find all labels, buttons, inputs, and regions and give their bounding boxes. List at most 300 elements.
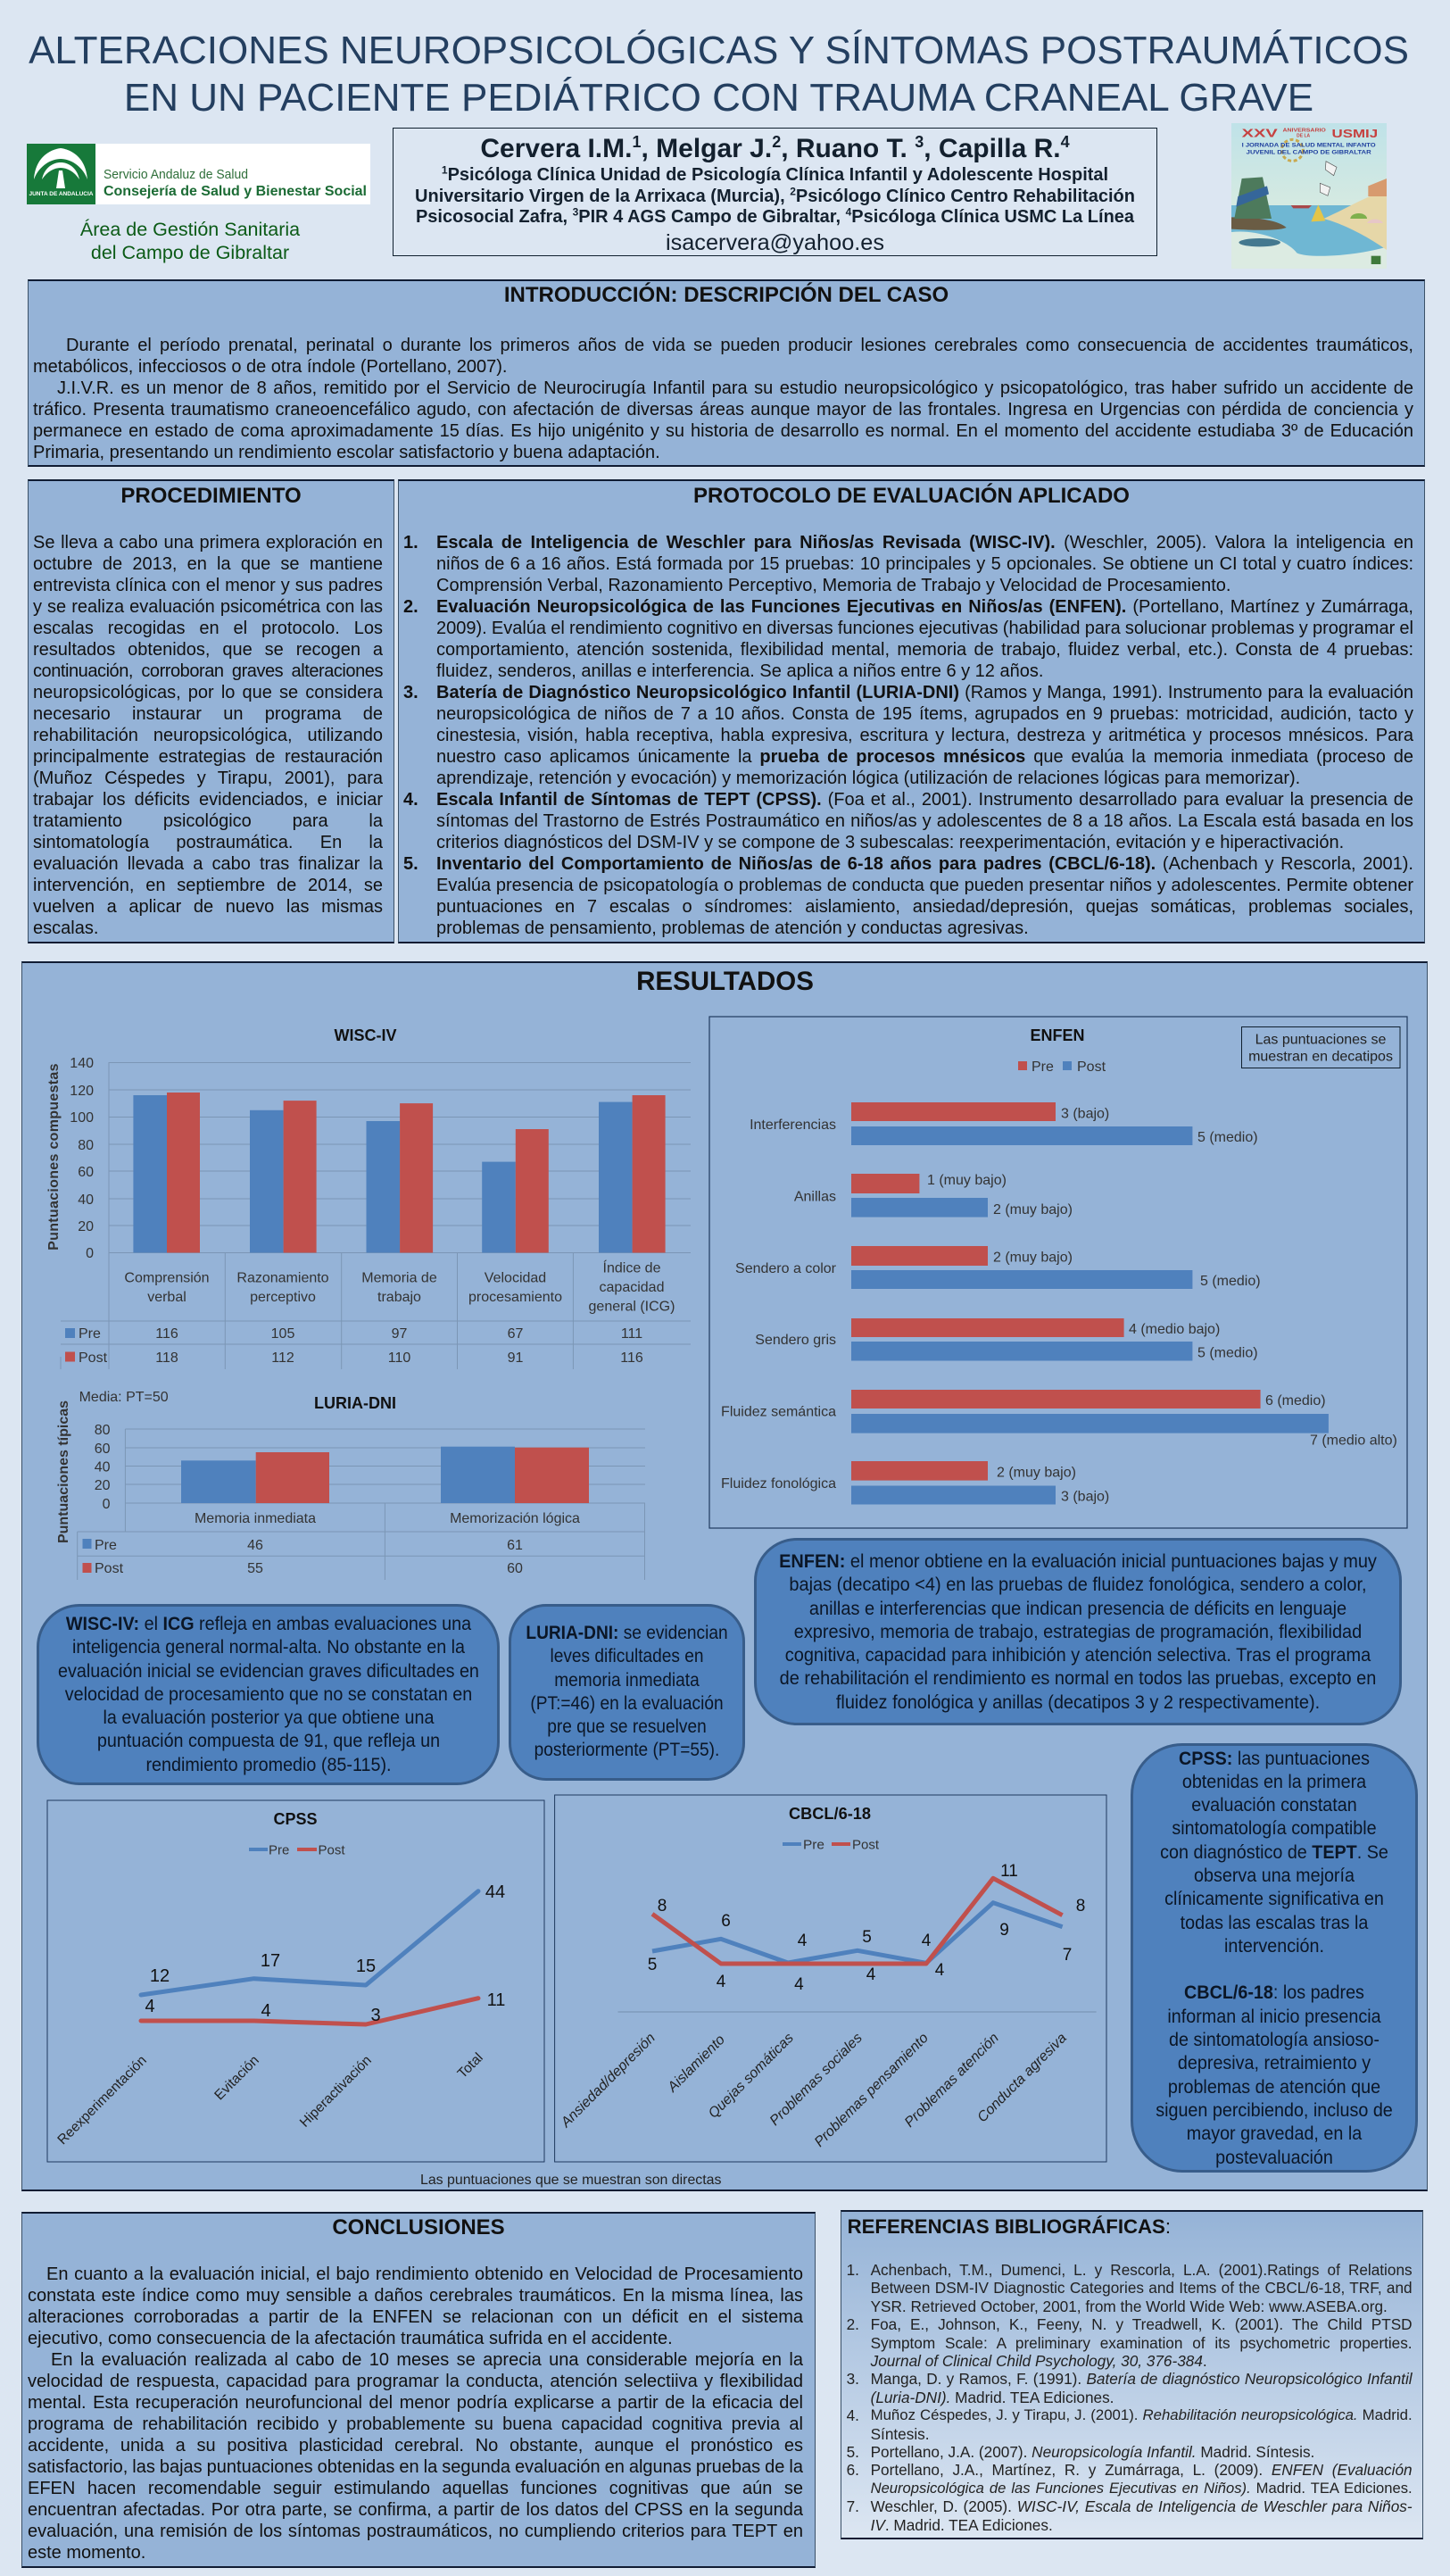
references list: Manga, D. y Ramos, F. (1991). Batería de diagnóstico Neuropsicológico Infantil (871, 2370, 1413, 2388)
callout: CPSS and CBCL: sintomatología compatible (1172, 1818, 1377, 1839)
WISC-IV data table: 118 (155, 1350, 178, 1366)
callout: CPSS and CBCL: observa una mejoría (1194, 1866, 1355, 1886)
WISC-IV category labels: Memoria de (361, 1271, 437, 1285)
CBCL data labels: 7 (1063, 1946, 1072, 1965)
CPSS x axis labels: Evitación (211, 2053, 262, 2103)
CPSS data labels: 12 (150, 1966, 170, 1986)
WISC-IV category labels: general (ICG) (589, 1300, 675, 1314)
references list: Symptom Scale: A preliminary examination of its psychometric properties. (871, 2334, 1413, 2352)
references list: Portellano, J.A. (2007). Neuropsicología Infantil. Madrid. Síntesis. (871, 2443, 1314, 2461)
CPSS title: CPSS (273, 1810, 318, 1828)
CBCL data labels: 8 (1076, 1897, 1085, 1915)
ENFEN data labels: 3 (bajo) (1061, 1489, 1109, 1505)
CBCL data labels: 6 (721, 1912, 731, 1931)
protocol list: Evaluación Neuropsicológica de las Funciones Ejecutivas en Niños/as (ENFEN). (Portellano, Martínez y Zumárraga, (436, 596, 1413, 616)
WISC-IV y axis title: Puntuaciones compuestas (46, 1063, 62, 1251)
LURIA data table: 60 (507, 1561, 523, 1576)
references list: Foa, E., Johnson, K., Feeny, N. y Treadwell, K. (2001). The Child PTSD (871, 2315, 1413, 2333)
panel: evaluation protocol: 5. (403, 853, 418, 873)
callout: CPSS and CBCL: postevaluación (1215, 2148, 1333, 2168)
protocol list: 2009). Evalúa el rendimiento cognitivo en diversas funciones ejecutivas (habilidad para solucionar problemas y programar el (436, 618, 1413, 637)
procedure text: y se realiza evaluación psicométrica con las (33, 596, 383, 616)
conference poster image (1231, 123, 1387, 269)
WISC-IV data table: 112 (271, 1350, 294, 1366)
callout: WISC-IV: puntuación compuesta de 91, que refleja un (96, 1731, 440, 1751)
procedure text: rehabilitación neuropsicológica, utilizando (33, 725, 383, 744)
introduction text: tráfico. Presenta traumatismo craneoencefálico agudo, con afectación de diversas áreas aunque mayor de las frontales. Ingresa en Urgencias con pérdida de conciencia y (33, 400, 1413, 420)
procedure text: intervención, en septiembre de 2014, se (33, 875, 383, 894)
ENFEN pre bars (851, 1102, 1261, 1481)
protocol list: Batería de Diagnóstico Neuropsicológico Infantil (LURIA-DNI) (Ramos y Manga, 1991). Instrumento para la evaluación (436, 682, 1413, 702)
WISC-IV data table: 91 (508, 1350, 523, 1366)
CBCL axis line (617, 2011, 1097, 2013)
callout: CPSS and CBCL: depresiva, retraimiento y (1178, 2053, 1371, 2073)
references list: IV. Madrid. TEA Ediciones. (871, 2516, 1053, 2534)
LURIA category labels (195, 1511, 580, 1526)
CBCL data labels: 5 (648, 1956, 657, 1974)
ENFEN category labels: Fluidez fonológica (721, 1476, 836, 1492)
procedure text: escalas recogidas en el protocolo. Los (33, 618, 383, 637)
references list: Portellano, J.A., Martínez, R. y Zumárraga, L. (2009). ENFEN (Evaluación (871, 2461, 1413, 2479)
ENFEN data labels: 5 (medio) (1197, 1130, 1258, 1145)
callout: CPSS and CBCL: clínicamente significativa en (1164, 1889, 1384, 1909)
CBCL pre line (652, 1903, 1063, 1963)
title: EN UN PACIENTE PEDIÁTRICO CON TRAUMA CRANEAL GRAVE (124, 76, 1313, 120)
WISC-IV category labels: Índice de (603, 1259, 661, 1276)
conclusions heading: CONCLUSIONES (332, 2215, 505, 2239)
CBCL x axis labels: Problemas pensamiento (812, 2031, 932, 2150)
protocol list: nuestro caso aplicamos únicamente la prueba de procesos mnésicos que evalúa la memoria inmediata (proceso de (436, 746, 1413, 766)
CBCL data labels: 5 (862, 1928, 872, 1947)
ENFEN data labels: 2 (muy bajo) (993, 1202, 1073, 1217)
callout: CPSS and CBCL: intervención. (1224, 1936, 1324, 1957)
conclusions text: evaluación, una remisión de los síntomas postraumáticos, no cumpliendo criterios para TEPT en (28, 2521, 803, 2540)
LURIA y axis labels: 40 (95, 1460, 111, 1475)
ENFEN post bars (851, 1126, 1329, 1505)
ENFEN frame (709, 1017, 1407, 1528)
protocol list: cinestesia, visión, habla receptiva, habla expresiva, escritura y lectura, destreza y aritmética y procesos mnésicos. Para (436, 725, 1413, 744)
panel: introduction (28, 279, 1425, 467)
CBCL x axis labels: Problemas sociales (767, 2031, 866, 2129)
logo: Servicio Andaluz de Salud: Servicio Andaluz de Salud (104, 168, 248, 182)
WISC-IV data table: 111 (621, 1326, 642, 1342)
callout: LURIA-DNI: posteriormente (PT=55). (534, 1740, 719, 1760)
affiliations: Psicosocial Zafra, 3PIR 4 AGS Campo de Gibraltar, 4Psicóloga Clínica USMC La Línea (416, 206, 1134, 227)
CBCL x axis labels: Quejas somáticas (706, 2031, 797, 2122)
WISC-IV data table: 110 (388, 1350, 410, 1366)
CBCL data labels: 4 (922, 1932, 932, 1950)
ENFEN title: ENFEN (1030, 1026, 1085, 1044)
logo: Servicio Andaluz de Salud (27, 144, 370, 204)
callout: WISC-IV: WISC-IV: el ICG refleja en ambas evaluaciones una (65, 1614, 471, 1634)
LURIA data table: Post (95, 1561, 124, 1576)
ENFEN data labels: 6 (medio) (1265, 1393, 1326, 1408)
introduction text: Durante el período prenatal, perinatal o durante los primeros años de vida se pueden producir lesiones cerebrales como consecuencia de accidentes traumáticos, (66, 336, 1413, 355)
WISC-IV data table (65, 1326, 643, 1366)
references list: Síntesis. (871, 2425, 930, 2443)
ENFEN note: muestran en decatipos (1248, 1050, 1393, 1064)
CPSS pre line (141, 1891, 478, 1995)
chart: ENFEN (709, 1017, 1407, 1528)
conference poster image: JUVENIL DEL CAMPO DE GIBRALTAR (1247, 149, 1371, 155)
panel: references: 6. (847, 2461, 859, 2479)
CBCL post line (652, 1878, 1063, 1964)
procedure heading: PROCEDIMIENTO (120, 484, 302, 508)
area sanitaria label: del Campo de Gibraltar (91, 242, 289, 263)
conclusions text: mental. Esta recuperación neurofuncional del menor podría explicarse a partir de la eficacia del (28, 2392, 803, 2412)
panel: references: 3. (847, 2370, 859, 2388)
CBCL frame (555, 1795, 1106, 2162)
conference poster image: DE LA (1297, 133, 1311, 138)
ENFEN data labels: 2 (muy bajo) (993, 1250, 1073, 1266)
introduction text: Primaria, presentando un rendimiento escolar satisfactorio y buena adaptación. (33, 443, 660, 462)
CBCL data labels: 4 (866, 1965, 876, 1984)
conclusions text: satisfactorio, las bajas puntuaciones obtenidas en la segunda evaluación en algunas pruebas de la (28, 2456, 803, 2476)
CPSS post line (141, 1998, 478, 2024)
CPSS data labels: 4 (261, 2001, 271, 2021)
callout: ENFEN: ENFEN: el menor obtiene en la evaluación inicial puntuaciones bajas y muy (779, 1551, 1377, 1572)
CBCL x axis labels (558, 2031, 1070, 2150)
chart: CBCL/6-18 (555, 1795, 1106, 2162)
LURIA y axis labels: 20 (95, 1478, 111, 1493)
callout: CPSS and CBCL: siguen percibiendo, incluso de (1156, 2100, 1393, 2121)
LURIA data table: Pre (95, 1538, 117, 1553)
conference poster image: USMIJ (1331, 128, 1378, 140)
conclusions text: En cuanto a la evaluación inicial, el bajo rendimiento obtenido en Velocidad de Procesamiento (46, 2264, 803, 2283)
WISC-IV y axis labels: 0 (86, 1246, 94, 1261)
LURIA category labels: Memoria inmediata (195, 1511, 316, 1526)
protocol list: aprendizaje, retención y evocación) y memorización lógica (utilización de relaciones lógicas para memorizar). (436, 768, 1300, 787)
callout: ENFEN: cognitiva, capacidad para inhibición y atención selectiva. Tras el programa (785, 1645, 1371, 1666)
procedure text (33, 532, 383, 937)
references list: Between DSM-IV Diagnostic Categories and Items of the CBCL/6-18, TRF, and (871, 2279, 1413, 2297)
panel: references: 4. (847, 2406, 859, 2424)
CBCL data labels: 4 (717, 1973, 726, 1991)
procedure text: vuelven a aplicar de nuevo las mismas (33, 896, 383, 916)
callout: ENFEN: anillas e interferencias que indican presencia de déficits en lenguaje (809, 1599, 1346, 1619)
CBCL data labels: 4 (798, 1932, 808, 1950)
WISC-IV pre bars (133, 1095, 633, 1253)
CPSS x axis labels: Reexperimentación (54, 2053, 150, 2148)
protocol list: Inventario del Comportamiento de Niños/as de 6-18 años para padres (CBCL/6-18). (Achenbach y Rescorla, 2001). (436, 853, 1413, 873)
LURIA data table (82, 1538, 523, 1576)
ENFEN category labels: Sendero a color (735, 1261, 837, 1276)
WISC-IV y axis labels: 20 (78, 1219, 94, 1234)
LURIA data table: 55 (247, 1561, 263, 1576)
protocol list: criterios diagnósticos del DSM-IV y se compone de 3 subescalas: reexperimentación, evitación y e hiperactivación. (436, 832, 1344, 852)
callout: WISC-IV: rendimiento promedio (85-115). (145, 1755, 391, 1775)
introduction heading: INTRODUCCIÓN: DESCRIPCIÓN DEL CASO (504, 283, 949, 307)
CBCL data labels: 4 (935, 1961, 945, 1980)
chart: LURIA-DNI (56, 1390, 645, 1580)
LURIA mean note: Media: PT=50 (79, 1390, 169, 1405)
conclusions text: alteraciones corroboradas a partir de la ENFEN se relacionan con un déficit en el sistema (28, 2306, 803, 2326)
CBCL x axis labels: Conducta agresiva (974, 2031, 1070, 2125)
procedure text: neuropsicológicas, por lo que se considera (33, 682, 383, 702)
procedure text: escalas. (33, 918, 98, 937)
callout: LURIA-DNI: (PT:=46) en la evaluación (530, 1693, 723, 1714)
title (29, 29, 1409, 120)
CPSS data labels: 4 (145, 1997, 155, 2016)
protocol heading: PROTOCOLO DE EVALUACIÓN APLICADO (693, 484, 1130, 508)
WISC-IV category labels: perceptivo (250, 1290, 316, 1305)
callout: LURIA-DNI: memoria inmediata (554, 1670, 699, 1691)
CBCL x axis labels: Problemas atención (902, 2031, 1002, 2131)
author names: Cervera I.M.1, Melgar J.2, Ruano T. 3, Capilla R.4 (480, 133, 1070, 163)
conference poster image: ANIVERSARIO (1283, 129, 1326, 134)
affiliations (415, 163, 1135, 227)
procedure text: entrevista clínica con el menor y sus padres (33, 575, 383, 594)
ENFEN note: Las puntuaciones se (1255, 1032, 1386, 1048)
callout: CPSS and CBCL (1131, 1743, 1418, 2173)
conclusions text: constata este índice como muy sensible a daños cerebrales traumáticos. En la misma línea, las (28, 2285, 803, 2305)
callout: WISC-IV: evaluación inicial se evidencian graves dificultades en (58, 1661, 478, 1682)
conference poster image: I JORNADA DE SALUD MENTAL INFANTO (1242, 142, 1376, 148)
CBCL data labels: 8 (658, 1897, 667, 1915)
protocol list: síntomas del Trastorno de Estrés Postraumático en niños/as y adolescentes de 8 a 18 años. La Escala está basada en los (436, 810, 1413, 830)
callout: ENFEN: fluidez fonológica y anillas (decatipos 3 y 2 respectivamente). (836, 1692, 1320, 1713)
WISC-IV category labels: Razonamiento (236, 1271, 329, 1285)
conclusions text: accidente, unida a su positiva plasticidad cerebral. No obstante, aunque el pronóstico es (28, 2435, 803, 2455)
conclusions text: velocidad de respuesta, capacidad para programar la conducta, atención selectiiva y flexibilidad (28, 2371, 803, 2390)
callout: CPSS and CBCL: con diagnóstico de TEPT. Se (1160, 1842, 1388, 1863)
procedure text: (Muñoz Céspedes y Tirapu, 2001), para (33, 768, 383, 787)
ENFEN legend: Pre (1032, 1059, 1054, 1075)
LURIA pre bars (181, 1447, 515, 1503)
title: ALTERACIONES NEUROPSICOLÓGICAS Y SÍNTOMAS POSTRAUMÁTICOS (29, 29, 1409, 72)
callout: ENFEN (754, 1538, 1402, 1725)
callout: LURIA-DNI: leves dificultades en (550, 1646, 703, 1666)
procedure text: continuación, corroboran graves alteraciones (33, 661, 383, 680)
callout: LURIA-DNI (509, 1604, 745, 1781)
WISC-IV data table: 97 (392, 1326, 407, 1342)
WISC-IV y axis labels: 80 (78, 1138, 94, 1153)
procedure text: evaluación llevada a cabo tras finalizar la (33, 853, 383, 873)
WISC-IV y axis labels: 100 (70, 1110, 94, 1126)
CPSS data labels: 11 (487, 1990, 505, 2010)
panel: references: 5. (847, 2443, 859, 2461)
references list (847, 2261, 1413, 2534)
ENFEN category labels (721, 1118, 837, 1492)
panel: evaluation protocol: 1. (403, 532, 418, 552)
panel: results (21, 961, 1428, 2191)
introduction text (33, 336, 1413, 462)
ENFEN data labels: 1 (muy bajo) (927, 1173, 1007, 1188)
panel: evaluation protocol (398, 479, 1425, 943)
conference poster image: XXV (1242, 127, 1279, 139)
LURIA y axis title: Puntuaciones típicas (56, 1400, 71, 1543)
ENFEN data labels: 4 (medio bajo) (1129, 1322, 1220, 1337)
panel: evaluation protocol: 4. (403, 789, 418, 809)
procedure text: resultados obtenidos, que se recogen a (33, 639, 383, 659)
procedure text: sintomatología postraumática. En la (33, 832, 383, 852)
WISC-IV category labels: Comprensión (124, 1271, 210, 1285)
protocol list: Comprensión Verbal, Razonamiento Perceptivo, Memoria de Trabajo y Velocidad de Procesamiento. (436, 575, 1230, 594)
WISC-IV category labels (124, 1259, 675, 1314)
panel: evaluation protocol: 2. (403, 596, 418, 616)
callout: CPSS and CBCL: problemas de atención que (1168, 2077, 1380, 2098)
LURIA category labels: Memorización lógica (450, 1511, 580, 1526)
callout: CPSS and CBCL: informan al inicio presencia (1167, 2007, 1381, 2027)
results heading: RESULTADOS (636, 967, 814, 996)
scores footnote: Las puntuaciones que se muestran son directas (420, 2173, 721, 2188)
callout: CPSS and CBCL: todas las escalas tras la (1181, 1913, 1368, 1933)
ENFEN legend: Post (1077, 1059, 1106, 1075)
conclusions text: encuentran afectadas. Por otra parte, se confirma, a partir de los datos del CPSS en la segunda (28, 2499, 803, 2519)
WISC-IV category labels: procesamiento (468, 1290, 562, 1305)
ENFEN category labels: Fluidez semántica (721, 1405, 836, 1420)
logo: Servicio Andaluz de Salud: Consejería de Salud y Bienestar Social (104, 184, 367, 199)
CPSS data labels: 17 (261, 1951, 280, 1971)
CPSS data labels: 3 (370, 2006, 381, 2025)
WISC-IV category labels: capacidad (600, 1280, 664, 1295)
ENFEN category labels: Sendero gris (755, 1333, 836, 1348)
references heading: REFERENCIAS BIBLIOGRÁFICAS: (848, 2215, 1171, 2238)
introduction text: permanece en estado de coma aproximadamente 15 días. Es hijo unigénito y su historia de desarrollo es normal. En el momento del accidente estudiaba 3º de Educación (33, 421, 1413, 441)
CPSS legend: Pre (269, 1842, 289, 1858)
WISC-IV y axis labels: 40 (78, 1192, 94, 1208)
panel: evaluation protocol: 3. (403, 682, 418, 702)
affiliations: Universitario Virgen de la Arrixaca (Murcia), 2Psicólogo Clínico Centro Rehabilitación (415, 185, 1135, 206)
CPSS data labels (145, 1882, 505, 2025)
conclusions text: programa de rehabilitación recibido y probablemente su buena capacidad cognitiva previa al (28, 2414, 803, 2433)
panel: references: 1. (847, 2261, 859, 2279)
WISC-IV data table: Pre (79, 1326, 101, 1342)
LURIA post bars (256, 1448, 589, 1503)
panel: procedure (28, 479, 394, 943)
procedure text: Se lleva a cabo una primera exploración en (33, 532, 383, 552)
WISC-IV y axis labels: 140 (70, 1056, 94, 1071)
CBCL x axis labels: Ansiedad/depresión (558, 2031, 659, 2131)
CBCL legend (783, 1837, 880, 1853)
protocol list: comportamiento, atención sostenida, flexibilidad mental, memoria de trabajo, fluidez verbal, etc.). Consta de 4 pruebas: (436, 639, 1413, 659)
LURIA title: LURIA-DNI (314, 1394, 396, 1412)
email: isacervera@yahoo.es (666, 230, 884, 255)
LURIA data table: 61 (507, 1538, 523, 1553)
WISC-IV data table: Post (79, 1350, 108, 1366)
callout: CPSS and CBCL: de sintomatología ansioso- (1169, 2030, 1380, 2050)
references list: Neuropsicológica de las Funciones Ejecutivas en Niños). Madrid. TEA Ediciones. (871, 2480, 1413, 2497)
WISC-IV data table: 105 (271, 1326, 294, 1342)
ENFEN data labels: 5 (medio) (1197, 1346, 1258, 1361)
CBCL data labels (648, 1862, 1085, 1994)
WISC-IV y axis labels (70, 1056, 94, 1261)
CPSS data labels: 15 (356, 1957, 376, 1976)
CPSS data labels: 44 (485, 1882, 505, 1902)
callout: WISC-IV: velocidad de procesamiento que no se constatan en (64, 1684, 472, 1705)
callout: LURIA-DNI: pre que se resuelven (547, 1716, 706, 1737)
references list: Journal of Clinical Child Psychology, 30, 376-384. (871, 2352, 1207, 2370)
callout: CPSS and CBCL: CPSS: las puntuaciones (1179, 1748, 1370, 1769)
WISC-IV category labels: verbal (147, 1290, 186, 1305)
introduction text: metabólicos, infecciosos o de otra índole (Portellano, 2007). (33, 357, 507, 377)
references list: Achenbach, T.M., Dumenci, L. y Rescorla, L.A. (2001).Ratings of Relations (871, 2261, 1413, 2279)
LURIA y axis labels: 60 (95, 1442, 111, 1457)
panel: conclusions (21, 2212, 816, 2568)
callout: WISC-IV (37, 1604, 500, 1785)
conclusions text: ejecutivo, como consecuencia de la afectación traumática sufrida en el accidente. (28, 2328, 673, 2347)
panel: references: 2. (847, 2315, 859, 2333)
references list: Weschler, D. (2005). WISC-IV, Escala de Inteligencia de Weschler para Niños- (871, 2497, 1413, 2515)
protocol list: Escala de Inteligencia de Weschler para Niños/as Revisada (WISC-IV). (Weschler, 2005). Valora la inteligencia en (436, 532, 1413, 552)
procedure text: necesario instaurar un programa de (33, 703, 383, 723)
references list: YSR. Retrieved October, 2001, from the World Wide Web: www.ASEBA.org. (871, 2298, 1388, 2315)
conclusions text: este momento. (28, 2542, 145, 2562)
ENFEN legend (1018, 1059, 1106, 1075)
protocol list: Escala Infantil de Síntomas de TEPT (CPSS). (Foa et al., 2001). Instrumento desarrollado para evaluar la presencia de (436, 789, 1413, 809)
CBCL x axis labels: Aislamiento (665, 2032, 728, 2096)
LURIA y axis labels: 0 (103, 1497, 111, 1512)
CBCL data labels: 9 (999, 1921, 1009, 1940)
LURIA y axis labels (95, 1423, 111, 1512)
WISC-IV data table: 116 (620, 1350, 643, 1366)
WISC-IV gridlines and axes (61, 1062, 691, 1369)
callout: WISC-IV: inteligencia general normal-alta. No obstante en la (71, 1637, 465, 1658)
procedure text: tratamiento psicológico para la (33, 810, 383, 830)
WISC-IV category labels: Velocidad (485, 1271, 546, 1285)
callout: CPSS and CBCL: evaluación constatan (1191, 1795, 1357, 1816)
CPSS frame (47, 1800, 544, 2162)
protocol list: problemas de pensamiento, problemas de atención y conductas agresivas. (436, 918, 1029, 937)
ENFEN category labels: Interferencias (750, 1118, 836, 1133)
CBCL title: CBCL/6-18 (789, 1805, 871, 1823)
CPSS x axis labels (54, 2050, 486, 2148)
CBCL data labels: 11 (1000, 1862, 1018, 1881)
callout: CPSS and CBCL: obtenidas en la primera (1182, 1772, 1366, 1792)
conclusions text: En la evaluación realizada al cabo de 10 meses se aprecia una considerable mejoría en la (51, 2349, 803, 2369)
ENFEN data labels: 3 (bajo) (1061, 1107, 1109, 1121)
panel: references: 7. (847, 2497, 859, 2515)
WISC-IV category labels: trabajo (377, 1290, 421, 1305)
ENFEN category labels: Anillas (794, 1189, 836, 1205)
callout: ENFEN: de rehabilitación el rendimiento es normal en todos las pruebas, excepto en (780, 1668, 1376, 1689)
LURIA gridlines (78, 1429, 645, 1580)
protocol list: fluidez, senderos, anillas e interferencia. Se aplica a niños entre 6 y 12 años. (436, 661, 1043, 680)
CPSS legend: Post (318, 1842, 345, 1858)
callout: ENFEN: bajas (decatipo <4) en las pruebas de fluidez fonológica, sendero a color, (789, 1575, 1367, 1595)
procedure text: principalmente estrategias de restauración (33, 746, 383, 766)
references list: Muñoz Céspedes, J. y Tirapu, J. (2001). Rehabilitación neuropsicológica. Madrid. (871, 2406, 1413, 2423)
WISC-IV data table: 67 (508, 1326, 523, 1342)
WISC-IV title: WISC-IV (334, 1026, 396, 1044)
protocol list (403, 532, 1413, 937)
LURIA data table: 46 (247, 1538, 263, 1553)
callout: LURIA-DNI: LURIA-DNI: se evidencian (526, 1623, 727, 1643)
protocol list: neuropsicológica de niños de 7 a 10 años. Consta de 195 ítems, agrupados en 9 pruebas: motricidad, audición, tacto y (436, 703, 1413, 723)
CPSS x axis labels: Total (455, 2050, 486, 2082)
callout: WISC-IV: la evaluación posterior ya que obtiene una (103, 1708, 434, 1728)
ENFEN data labels: 5 (medio) (1200, 1274, 1261, 1289)
WISC-IV post bars (167, 1093, 666, 1253)
WISC-IV y axis labels: 120 (70, 1084, 94, 1099)
chart: CPSS (47, 1800, 544, 2162)
WISC-IV y axis labels: 60 (78, 1165, 94, 1180)
panel: references (841, 2210, 1423, 2539)
LURIA y axis labels: 80 (95, 1423, 111, 1438)
logo: Servicio Andaluz de Salud: JUNTA DE ANDALUCIA (29, 191, 94, 197)
CBCL legend: Post (852, 1837, 880, 1853)
conclusions text (28, 2264, 803, 2562)
ENFEN note (1242, 1026, 1400, 1068)
CBCL legend: Pre (803, 1837, 824, 1853)
callout: CPSS and CBCL: CBCL/6-18: los padres (1184, 1982, 1364, 2003)
conclusions text: EFEN hacen recomendable seguir estimulando aquellas funciones cognitivas que aún se (28, 2478, 803, 2497)
procedure text: octubre de 2013, en la que se mantiene (33, 553, 383, 573)
callout: CPSS and CBCL: mayor gravedad, en la (1187, 2123, 1362, 2144)
protocol list: puntuaciones en 7 escalas o síndromes: aislamiento, ansiedad/depresión, quejas somáticas, problemas sociales, (436, 896, 1413, 916)
references list: (Luria-DNI). Madrid. TEA Ediciones. (871, 2389, 1114, 2406)
CBCL data labels: 4 (794, 1975, 804, 1994)
